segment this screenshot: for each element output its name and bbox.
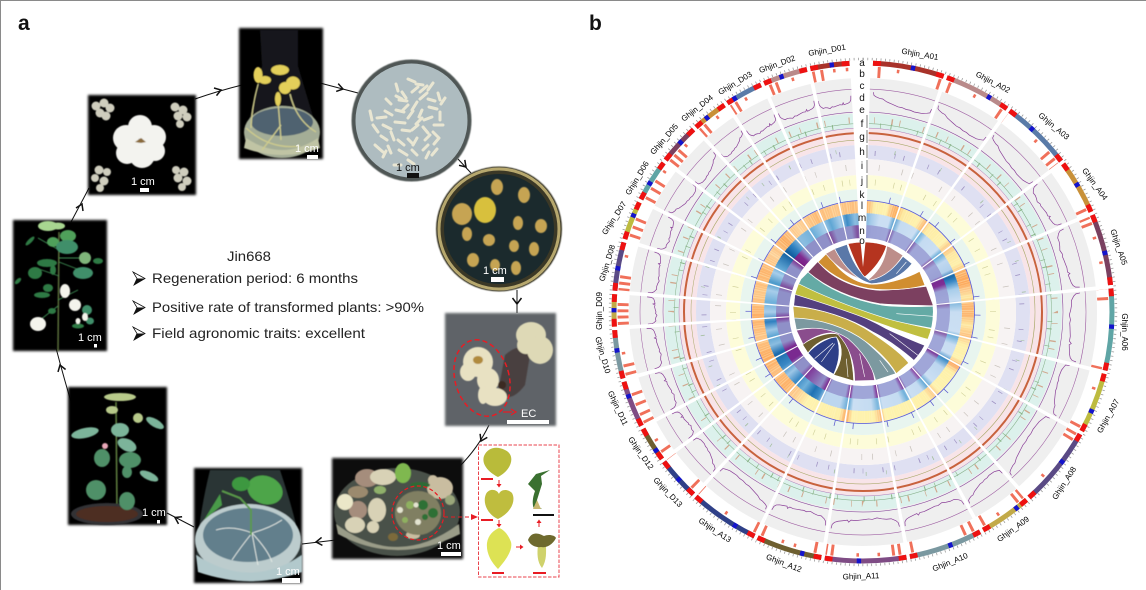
text block: Jin668 summary: Jin668 xyxy=(227,248,271,264)
chromosome labels: Ghjin_A12 xyxy=(765,552,803,574)
photo: flask with sterile seedlings xyxy=(239,28,323,159)
panel a: regeneration cycle xyxy=(13,12,562,583)
track legend axis xyxy=(866,115,868,188)
chromosome labels: Ghjin_A05 xyxy=(1108,228,1129,267)
chromosome labels xyxy=(593,42,1129,581)
chromosome labels: Ghjin_D10 xyxy=(593,336,612,375)
track letters a to o: d xyxy=(859,93,865,104)
arrows between stages xyxy=(56,83,522,545)
photo: callus flask with somatic embryos: 1 cm xyxy=(437,540,461,552)
track letters a to o: a xyxy=(859,58,865,69)
chromosome labels: Ghjin_A01 xyxy=(901,47,940,62)
chromosome labels: Ghjin_D08 xyxy=(597,243,617,282)
photo: seedling in flask xyxy=(194,468,302,583)
photo: embryogenic callus EC xyxy=(445,313,556,426)
photo: dish with embryogenic calli xyxy=(436,166,562,292)
chromosome labels: Ghjin_D05 xyxy=(648,122,680,156)
track letters a to o: i xyxy=(861,161,863,172)
text block: Jin668 summary xyxy=(133,248,424,341)
chromosome labels: Ghjin_D11 xyxy=(606,389,630,427)
track letters a to o: f xyxy=(861,119,864,130)
chord diagram xyxy=(793,240,934,381)
chromosome labels: Ghjin_D12 xyxy=(626,435,656,472)
chromosome labels: Ghjin_D03 xyxy=(717,69,754,97)
track letters a to o: j xyxy=(860,176,863,187)
track letters a to o: b xyxy=(859,69,865,80)
track d: per-chromosome curves xyxy=(647,92,1081,528)
photo: mature field cotton plant: 1 cm xyxy=(78,332,102,344)
track letters a to o: k xyxy=(860,190,866,201)
chromosome labels: Ghjin_A13 xyxy=(697,516,733,545)
chromosome labels: Ghjin_A10 xyxy=(931,551,970,573)
chromosome labels: Ghjin_A07 xyxy=(1095,397,1122,435)
heatmap rings l m n xyxy=(751,200,975,424)
track letters a to o: l xyxy=(861,201,863,212)
track letters a to o: c xyxy=(860,81,864,92)
photo: cotton boll and seeds: 1 cm xyxy=(131,176,155,188)
panel b: circos genome plot xyxy=(589,12,1129,581)
photo: dish with rice-like explants: 1 cm xyxy=(396,162,420,174)
chromosome labels: Ghjin_D01 xyxy=(808,42,847,58)
panel label a: a xyxy=(18,12,30,35)
chromosome labels: Ghjin_D07 xyxy=(600,199,629,236)
text block: Jin668 summary: Regeneration period: 6 months xyxy=(152,270,358,286)
track letters a to o: e xyxy=(859,105,865,116)
track letters a to o: h xyxy=(859,147,865,158)
track letters a to o: o xyxy=(859,236,865,247)
photo: callus flask with somatic embryos xyxy=(332,458,463,559)
photo: seedling in flask: 1 cm xyxy=(276,566,300,578)
chromosome labels: Ghjin_D02 xyxy=(758,53,797,75)
chromosome labels: Ghjin_A03 xyxy=(1037,111,1071,142)
sector gaps (white spokes) xyxy=(617,64,1108,555)
photo: embryogenic callus EC: EC xyxy=(521,408,536,420)
photo: dish with embryogenic calli: 1 cm xyxy=(483,265,507,277)
photo: dish with rice-like explants xyxy=(352,60,472,182)
chromosome labels: Ghjin_D09 xyxy=(595,292,604,330)
photo: cotton boll and seeds xyxy=(88,95,196,195)
chromosome labels: Ghjin_D06 xyxy=(624,159,651,197)
embryo stages in red dashed box xyxy=(444,445,559,577)
panel label b: b xyxy=(589,12,602,35)
photo: potted cotton plant xyxy=(68,387,167,525)
track letters a to o: n xyxy=(859,226,865,237)
text block: Jin668 summary: Positive rate of transformed plants: >90% xyxy=(152,299,424,315)
chromosome labels: Ghjin_A09 xyxy=(995,514,1031,544)
concentric track bands xyxy=(620,69,1106,555)
chromosome ideogram ring xyxy=(610,59,1116,565)
chromosome labels: Ghjin_D04 xyxy=(680,93,715,123)
photo: flask with sterile seedlings: 1 cm xyxy=(295,143,319,155)
chromosome labels: Ghjin_A08 xyxy=(1050,465,1078,501)
chromosome labels: Ghjin_D13 xyxy=(651,475,685,509)
photo: mature field cotton plant xyxy=(13,220,107,351)
photo: potted cotton plant: 1 cm xyxy=(142,507,166,519)
track letters a to o xyxy=(858,58,866,247)
track b: red bars xyxy=(623,72,1103,552)
track letters a to o: g xyxy=(859,132,865,143)
chromosome labels: Ghjin_A02 xyxy=(974,70,1012,95)
chromosome labels: Ghjin_A06 xyxy=(1120,313,1129,351)
chromosome labels: Ghjin_A11 xyxy=(842,571,880,581)
text block: Jin668 summary: Field agronomic traits: excellent xyxy=(152,325,365,341)
track letters a to o: m xyxy=(858,213,866,224)
chromosome labels: Ghjin_A04 xyxy=(1080,166,1110,202)
